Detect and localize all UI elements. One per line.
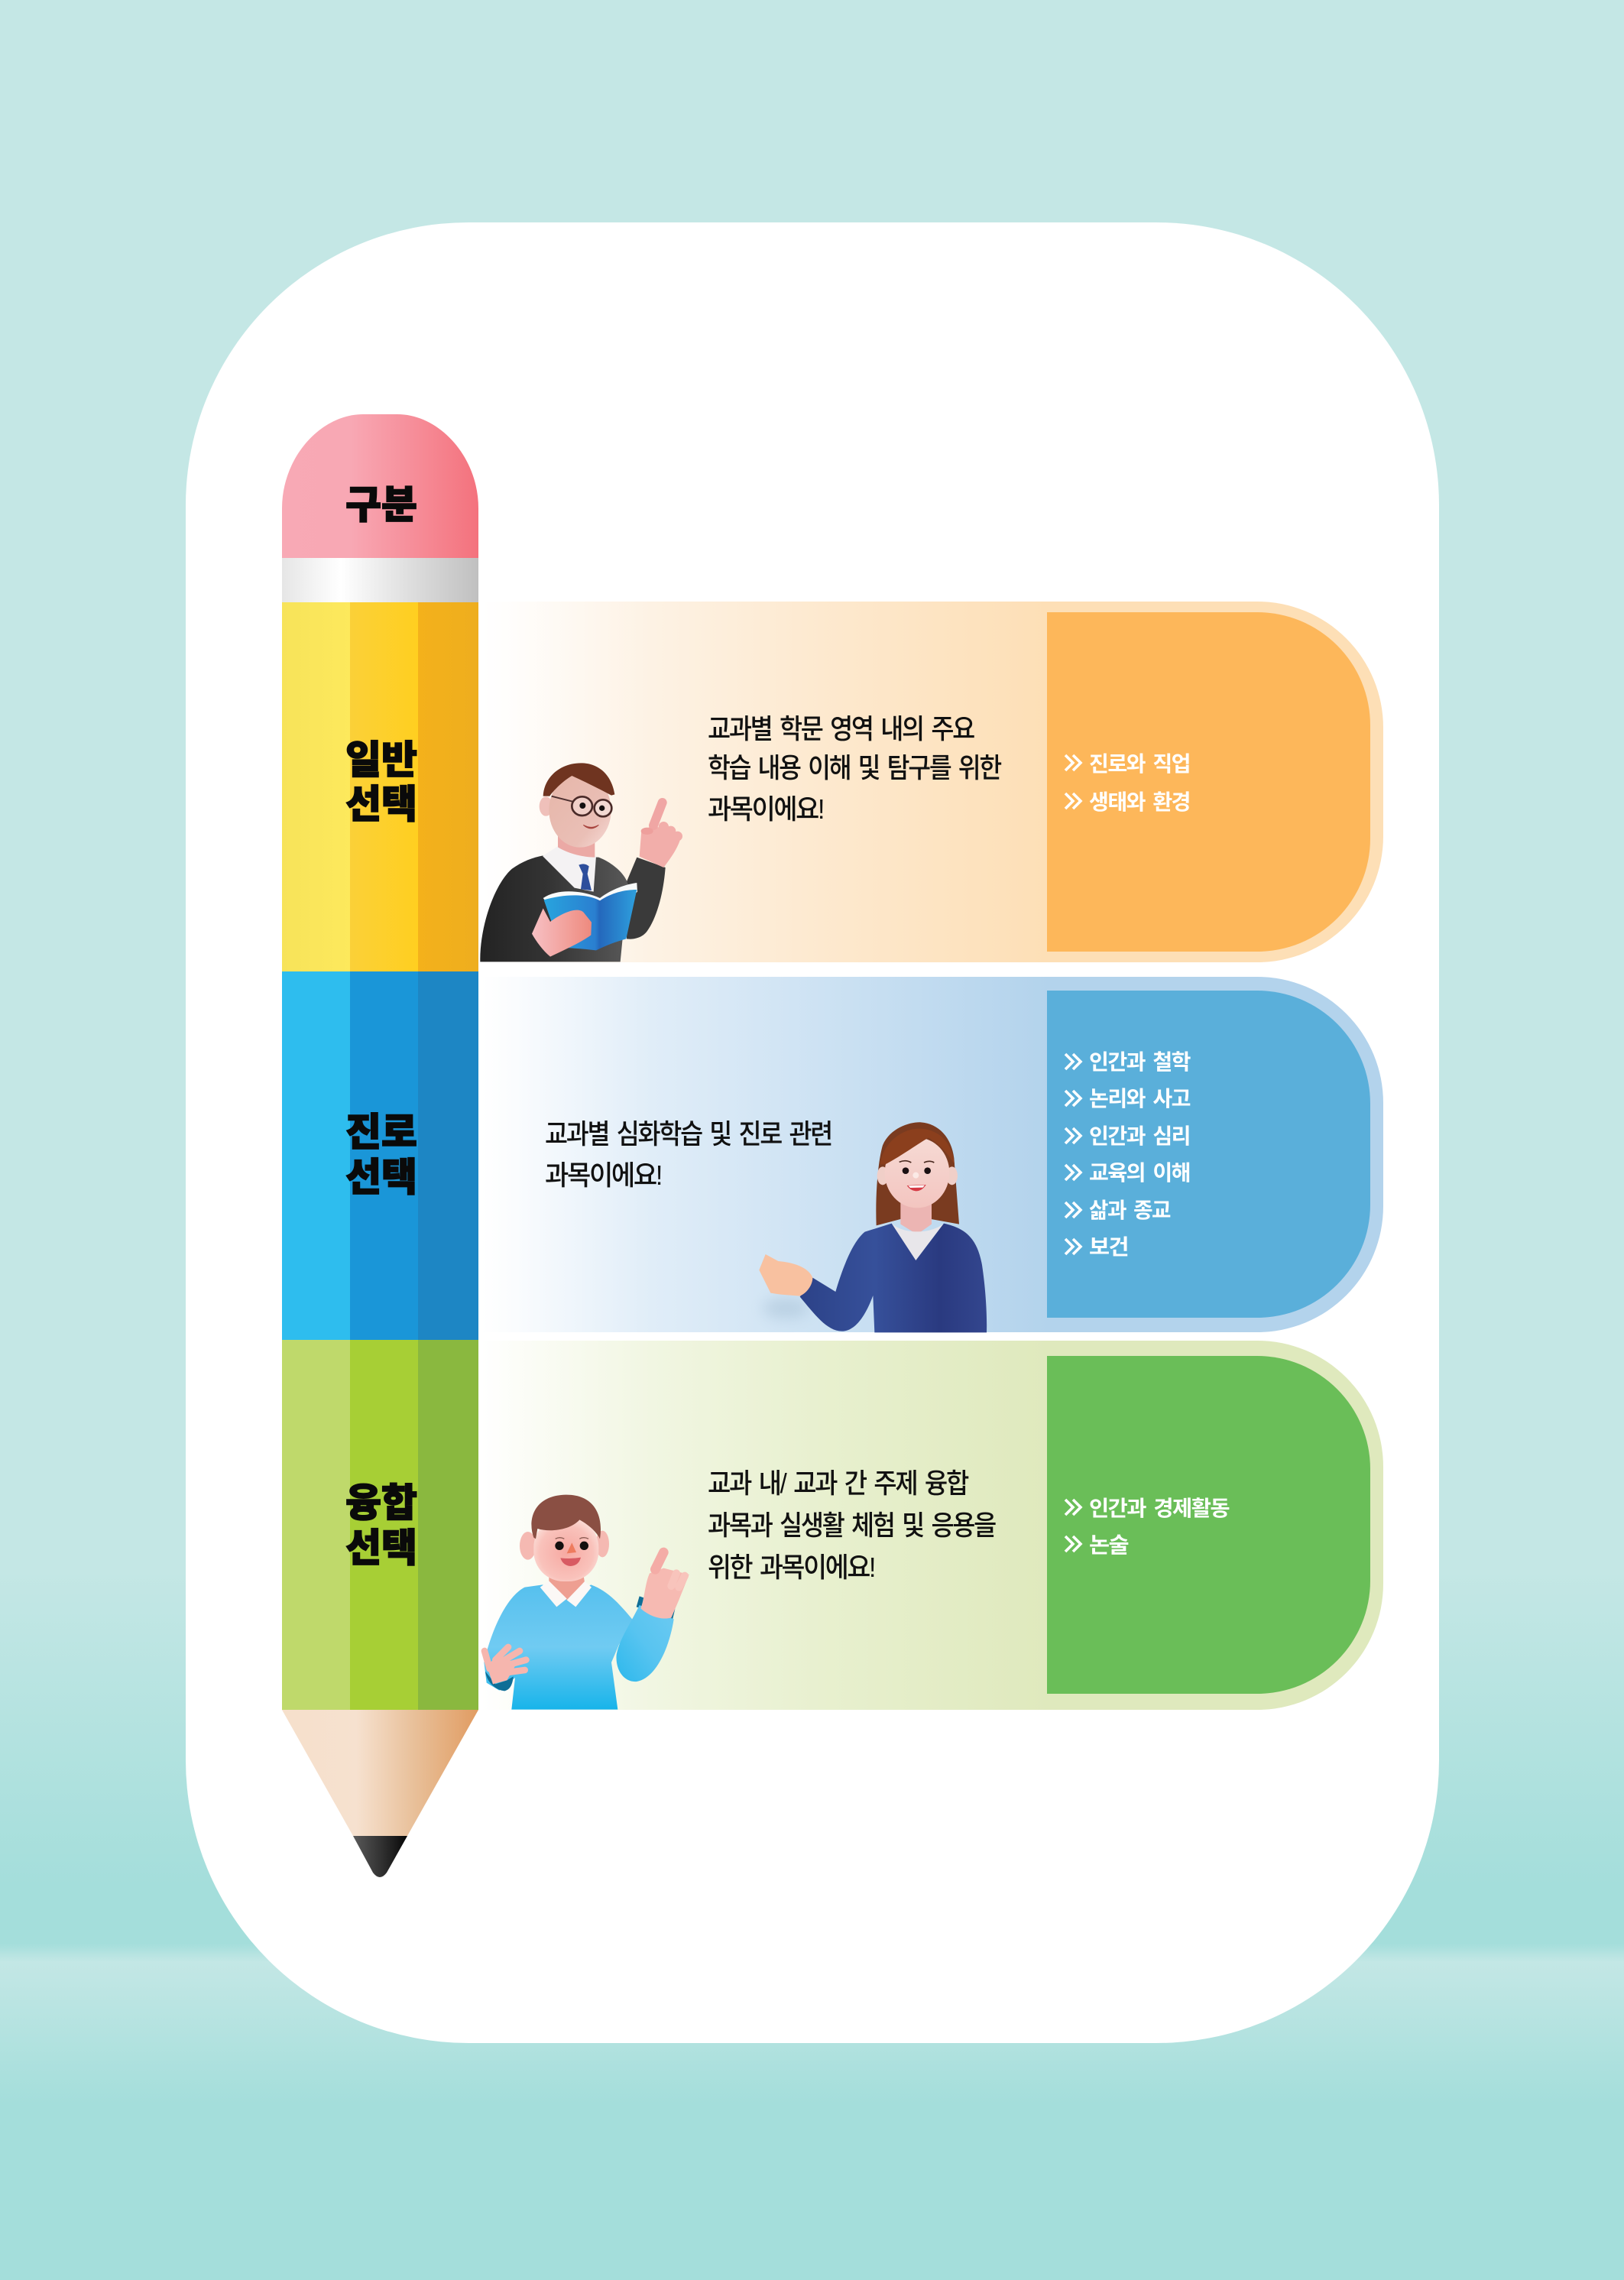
description text: 과목이에요! xyxy=(708,793,823,825)
pencil column xyxy=(282,414,478,1877)
description text xyxy=(545,1118,831,1191)
subject list: 인간과 심리 xyxy=(1089,1124,1190,1148)
subject list: 논술 xyxy=(1089,1533,1129,1557)
pencil wood tip xyxy=(282,1710,478,1836)
pencil blue body xyxy=(282,971,478,1340)
subject list: 논리와 사고 xyxy=(1089,1087,1191,1111)
subject box green xyxy=(1047,1356,1370,1694)
icon: woman teacher gesturing xyxy=(759,1122,987,1332)
pencil lead xyxy=(353,1836,407,1877)
icon: teacher with book xyxy=(480,763,682,962)
subject list xyxy=(1065,1050,1191,1259)
row background green xyxy=(481,1341,1383,1710)
white card panel xyxy=(186,222,1439,2043)
label: career elective: 진로 xyxy=(345,1111,417,1154)
subject list: 인간과 철학 xyxy=(1089,1050,1191,1074)
label: convergence elective: 선택 xyxy=(345,1526,417,1570)
description text: 학습 내용 이해 및 탐구를 위한 xyxy=(708,752,1001,783)
description text: 위한 과목이에요! xyxy=(708,1552,874,1583)
description text xyxy=(708,713,1001,825)
subject list: 삶과 종교 xyxy=(1089,1198,1171,1222)
label: general elective: 일반 xyxy=(345,738,417,782)
label: general elective: 선택 xyxy=(345,783,417,826)
subject list xyxy=(1065,1497,1230,1557)
description text xyxy=(708,1468,996,1583)
row background blue xyxy=(481,977,1383,1332)
panel: general elective row xyxy=(481,602,1383,962)
description text: 교과별 학문 영역 내의 주요 xyxy=(708,713,974,744)
row background orange xyxy=(481,602,1383,962)
subject list: 인간과 경제활동 xyxy=(1089,1497,1230,1520)
description text: 과목과 실생활 체험 및 응용을 xyxy=(708,1510,996,1541)
subject list: 생태와 환경 xyxy=(1089,790,1190,814)
label: convergence elective: 융합 xyxy=(345,1481,417,1525)
pencil eraser xyxy=(282,414,478,558)
label: career elective: 선택 xyxy=(345,1156,417,1199)
pencil yellow body xyxy=(282,602,478,971)
subject list: 보건 xyxy=(1089,1235,1128,1259)
pencil ferrule xyxy=(282,558,478,602)
description text: 과목이에요! xyxy=(545,1159,661,1191)
panel: career elective row xyxy=(481,977,1383,1332)
icon: student in blue sweater xyxy=(484,1495,689,1710)
label: category: 구분 xyxy=(345,483,417,527)
subject list: 교육의 이해 xyxy=(1089,1161,1190,1185)
pencil green body xyxy=(282,1340,478,1710)
subject list: 진로와 직업 xyxy=(1089,752,1190,776)
description text: 교과별 심화학습 및 진로 관련 xyxy=(545,1118,831,1150)
subject list xyxy=(1065,752,1190,814)
description text: 교과 내/ 교과 간 주제 융합 xyxy=(708,1468,968,1499)
panel: convergence elective row xyxy=(481,1341,1383,1710)
subject box blue xyxy=(1047,991,1370,1318)
subject box orange xyxy=(1047,612,1370,952)
